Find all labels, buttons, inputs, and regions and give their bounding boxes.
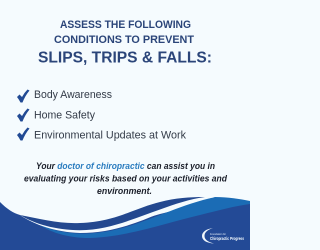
title: SLIPS, TRIPS & FALLS: bbox=[38, 50, 212, 66]
logo arc bbox=[202, 228, 214, 244]
paragraph: evaluating your risks based on your activities and bbox=[24, 174, 227, 184]
wave: bright band bbox=[38, 197, 250, 238]
logo small text: Foundation for bbox=[210, 233, 226, 236]
title bbox=[38, 19, 212, 66]
wave: main blue bbox=[0, 202, 250, 250]
item: body awareness: Body Awareness bbox=[34, 89, 112, 101]
icon: check 3 bbox=[17, 128, 30, 140]
paragraph: Your doctor of chiropractic can assist you in bbox=[36, 161, 215, 171]
logo bbox=[202, 228, 244, 244]
icon: check 2 bbox=[17, 108, 30, 122]
wave: navy band bbox=[20, 197, 205, 230]
icon: check 1 bbox=[17, 90, 30, 102]
footer waves bbox=[0, 197, 250, 250]
paragraph bbox=[24, 161, 227, 196]
item: home safety: Home Safety bbox=[34, 110, 95, 122]
paragraph: environment. bbox=[97, 186, 152, 196]
item: environmental updates: Environmental Updates at Work bbox=[34, 130, 186, 142]
title: CONDITIONS TO PREVENT bbox=[54, 34, 194, 46]
infographic canvas bbox=[0, 19, 250, 250]
wave: white stripe bbox=[20, 198, 215, 233]
checklist bbox=[17, 89, 186, 142]
title: ASSESS THE FOLLOWING bbox=[60, 19, 191, 31]
